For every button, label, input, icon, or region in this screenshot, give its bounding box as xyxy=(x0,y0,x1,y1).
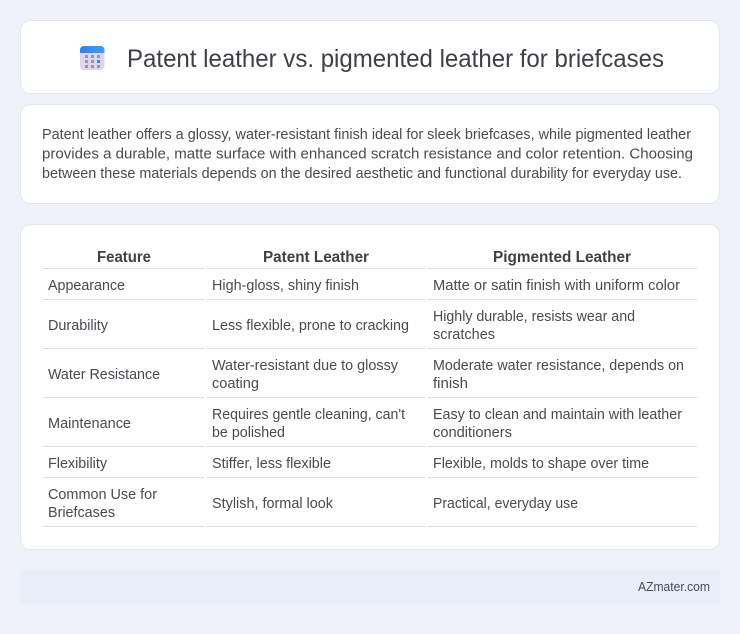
table row: maintenance: be polished xyxy=(212,425,285,441)
table header row xyxy=(43,249,697,268)
table row: maintenance xyxy=(43,407,697,446)
footer credit: AZmater.com xyxy=(638,579,710,594)
table row: water resistance: Water-resistant due to glossy xyxy=(212,358,399,374)
table row: flexibility: Stiffer, less flexible xyxy=(212,456,331,472)
table row: water resistance xyxy=(43,358,697,398)
panel: comparison table xyxy=(20,224,720,550)
table row: durability: Less flexible, prone to cracking xyxy=(212,318,409,334)
title: Patent leather vs. pigmented leather for briefcases xyxy=(127,45,664,73)
panel: introduction xyxy=(20,104,720,204)
table row: common use for briefcases: Briefcases xyxy=(48,505,115,521)
table row: water resistance: coating xyxy=(212,376,259,392)
text block: summary paragraph: provides a durable, matte surface with enhanced scratch resistance and color retention. Choosing xyxy=(42,146,693,162)
table row: durability: scratches xyxy=(433,327,495,343)
table row: common use for briefcases: Practical, everyday use xyxy=(433,496,578,512)
table row: maintenance: Maintenance xyxy=(48,416,131,432)
table row: durability: Durability xyxy=(48,318,109,334)
table row: flexibility: Flexible, molds to shape over time xyxy=(433,456,649,472)
table header row: Patent Leather xyxy=(263,249,369,266)
table row: appearance: Matte or satin finish with uniform color xyxy=(433,278,680,294)
table row: flexibility xyxy=(43,456,697,478)
table row: durability xyxy=(43,309,697,348)
table header row: Feature xyxy=(97,249,151,266)
table row: appearance: Appearance xyxy=(48,278,125,294)
table row: maintenance: conditioners xyxy=(433,425,512,441)
icon: calendar xyxy=(80,46,104,70)
table row: durability: Highly durable, resists wear and xyxy=(433,309,635,325)
table row: water resistance: finish xyxy=(433,376,468,392)
table row: maintenance: Requires gentle cleaning, can't xyxy=(212,407,405,423)
table row: appearance xyxy=(43,278,697,300)
text block: summary paragraph: between these materials depends on the desired aesthetic and functional durability for everyday use. xyxy=(42,166,682,182)
panel: title header xyxy=(20,20,720,94)
table row: flexibility: Flexibility xyxy=(48,456,108,472)
table row: water resistance: Water Resistance xyxy=(48,367,160,383)
table row: common use for briefcases: Stylish, formal look xyxy=(212,496,334,512)
table header row: Pigmented Leather xyxy=(493,249,631,266)
text block: summary paragraph: Patent leather offers a glossy, water-resistant finish ideal for sleek briefcases, while pigmented leather xyxy=(42,127,691,143)
table row: common use for briefcases: Common Use for xyxy=(48,487,157,503)
table row: appearance: High-gloss, shiny finish xyxy=(212,278,359,294)
table row: water resistance: Moderate water resistance, depends on xyxy=(433,358,684,374)
text block: summary paragraph xyxy=(42,127,693,182)
footer band xyxy=(20,570,720,604)
table row: common use for briefcases xyxy=(43,487,697,526)
table row: maintenance: Easy to clean and maintain with leather xyxy=(433,407,682,423)
